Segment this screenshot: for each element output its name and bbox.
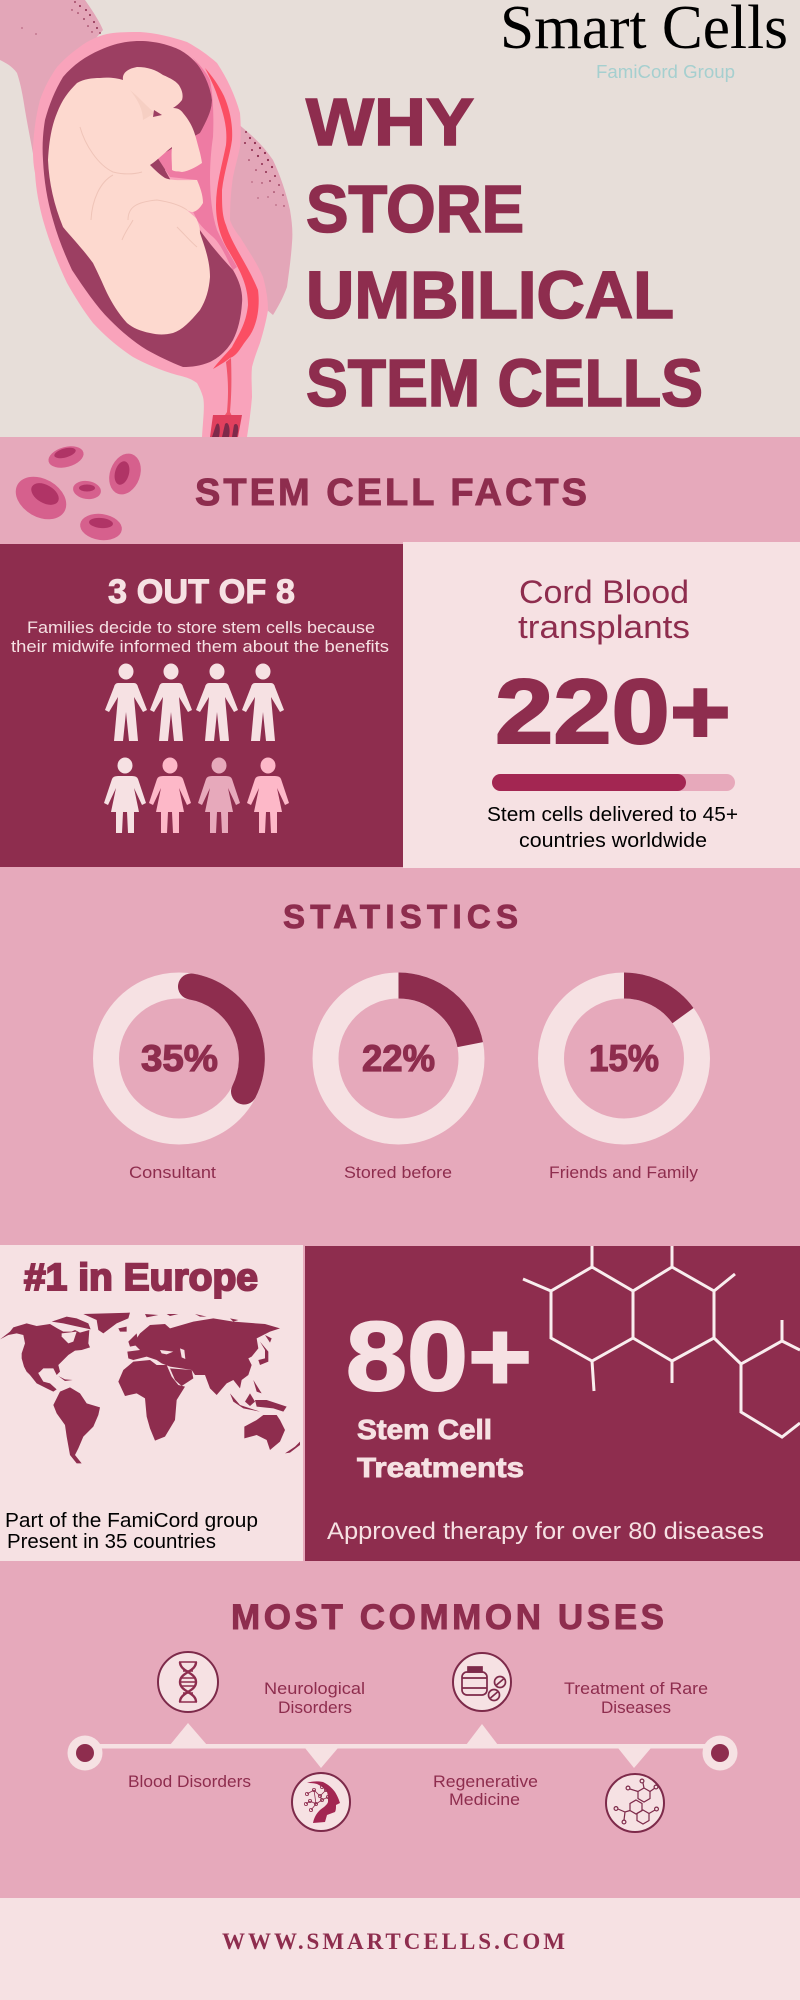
heading: MOST COMMON USES xyxy=(231,1598,664,1637)
title: STORE xyxy=(306,172,524,247)
heading: Cord Blood xyxy=(519,574,689,610)
donut: 35% consultant: Consultant xyxy=(129,1163,216,1182)
illustration: fetus in womb xyxy=(0,0,292,437)
panel: footer website: WWW.SMARTCELLS.COM xyxy=(222,1929,565,1954)
subheading: Stem Cell xyxy=(357,1414,492,1445)
panel: number one in Europe xyxy=(0,1245,303,1561)
icon: head with network xyxy=(292,1773,350,1831)
stat heading: 3 OUT OF 8 xyxy=(108,573,295,611)
panel: most common uses xyxy=(0,1561,800,1898)
donut: 35% consultant: 35% xyxy=(141,1038,218,1079)
world map xyxy=(0,1313,300,1463)
logo: Smart Cells: FamiCord Group xyxy=(596,62,735,82)
donut: 22% stored before: 22% xyxy=(362,1038,435,1079)
icon: pills xyxy=(453,1653,511,1711)
panel: stem cell facts banner xyxy=(0,437,800,544)
panel: 3 out of 8 xyxy=(0,544,403,867)
text block: Stem cells delivered to 45+ xyxy=(487,804,738,826)
labels: Blood Disorders xyxy=(128,1772,251,1791)
text block: their midwife informed them about the benefits xyxy=(11,638,389,656)
title xyxy=(306,85,703,421)
panel: statistics xyxy=(0,868,800,1245)
title: WHY xyxy=(306,85,474,160)
heading: transplants xyxy=(518,609,690,645)
big number: 220+ xyxy=(495,661,731,763)
panel: footer website xyxy=(0,1898,800,2000)
timeline xyxy=(68,1723,738,1770)
big number: 80+ xyxy=(346,1301,532,1411)
labels: Neurological xyxy=(264,1679,365,1698)
icon: women row xyxy=(104,758,289,833)
title: UMBILICAL xyxy=(306,258,674,333)
subheading: Treatments xyxy=(357,1452,524,1483)
text block xyxy=(487,804,738,852)
heading: STATISTICS xyxy=(283,898,518,935)
donut: 22% stored before xyxy=(326,986,472,1182)
heading: #1 in Europe xyxy=(24,1257,258,1299)
subheading xyxy=(357,1414,524,1483)
labels: Disorders xyxy=(278,1698,352,1717)
heading: stem cell facts: STEM CELL FACTS xyxy=(195,472,587,514)
icon: DNA xyxy=(158,1652,218,1712)
labels xyxy=(128,1679,708,1809)
donut: 22% stored before: Stored before xyxy=(344,1163,452,1182)
text block: Present in 35 countries xyxy=(7,1531,216,1553)
labels: Medicine xyxy=(449,1790,520,1809)
labels: Regenerative xyxy=(433,1772,538,1791)
donut: 15% friends and family: 15% xyxy=(589,1038,659,1079)
donut: 15% friends and family: Friends and Family xyxy=(549,1163,699,1182)
heading xyxy=(518,574,690,645)
text block: countries worldwide xyxy=(519,830,707,852)
panel: header xyxy=(0,0,800,437)
icon: men row xyxy=(105,664,284,741)
icon: blood cells xyxy=(8,443,146,543)
donut: 15% friends and family xyxy=(549,986,699,1182)
text block: Approved therapy for over 80 diseases xyxy=(327,1518,764,1545)
text block xyxy=(5,1510,258,1553)
labels: Diseases xyxy=(601,1698,671,1717)
title: STEM CELLS xyxy=(306,346,703,421)
text block xyxy=(11,619,389,656)
panel: 80+ treatments xyxy=(305,1246,800,1561)
icon: molecule hexagons xyxy=(523,1246,800,1437)
labels: Treatment of Rare xyxy=(564,1679,708,1698)
panel: cord blood transplants xyxy=(403,542,800,868)
donut: 35% consultant xyxy=(106,986,252,1182)
progress bar xyxy=(492,774,735,791)
text block: Part of the FamiCord group xyxy=(5,1510,258,1532)
icon: chemical structure xyxy=(606,1774,664,1832)
text block: Families decide to store stem cells because xyxy=(27,619,375,637)
